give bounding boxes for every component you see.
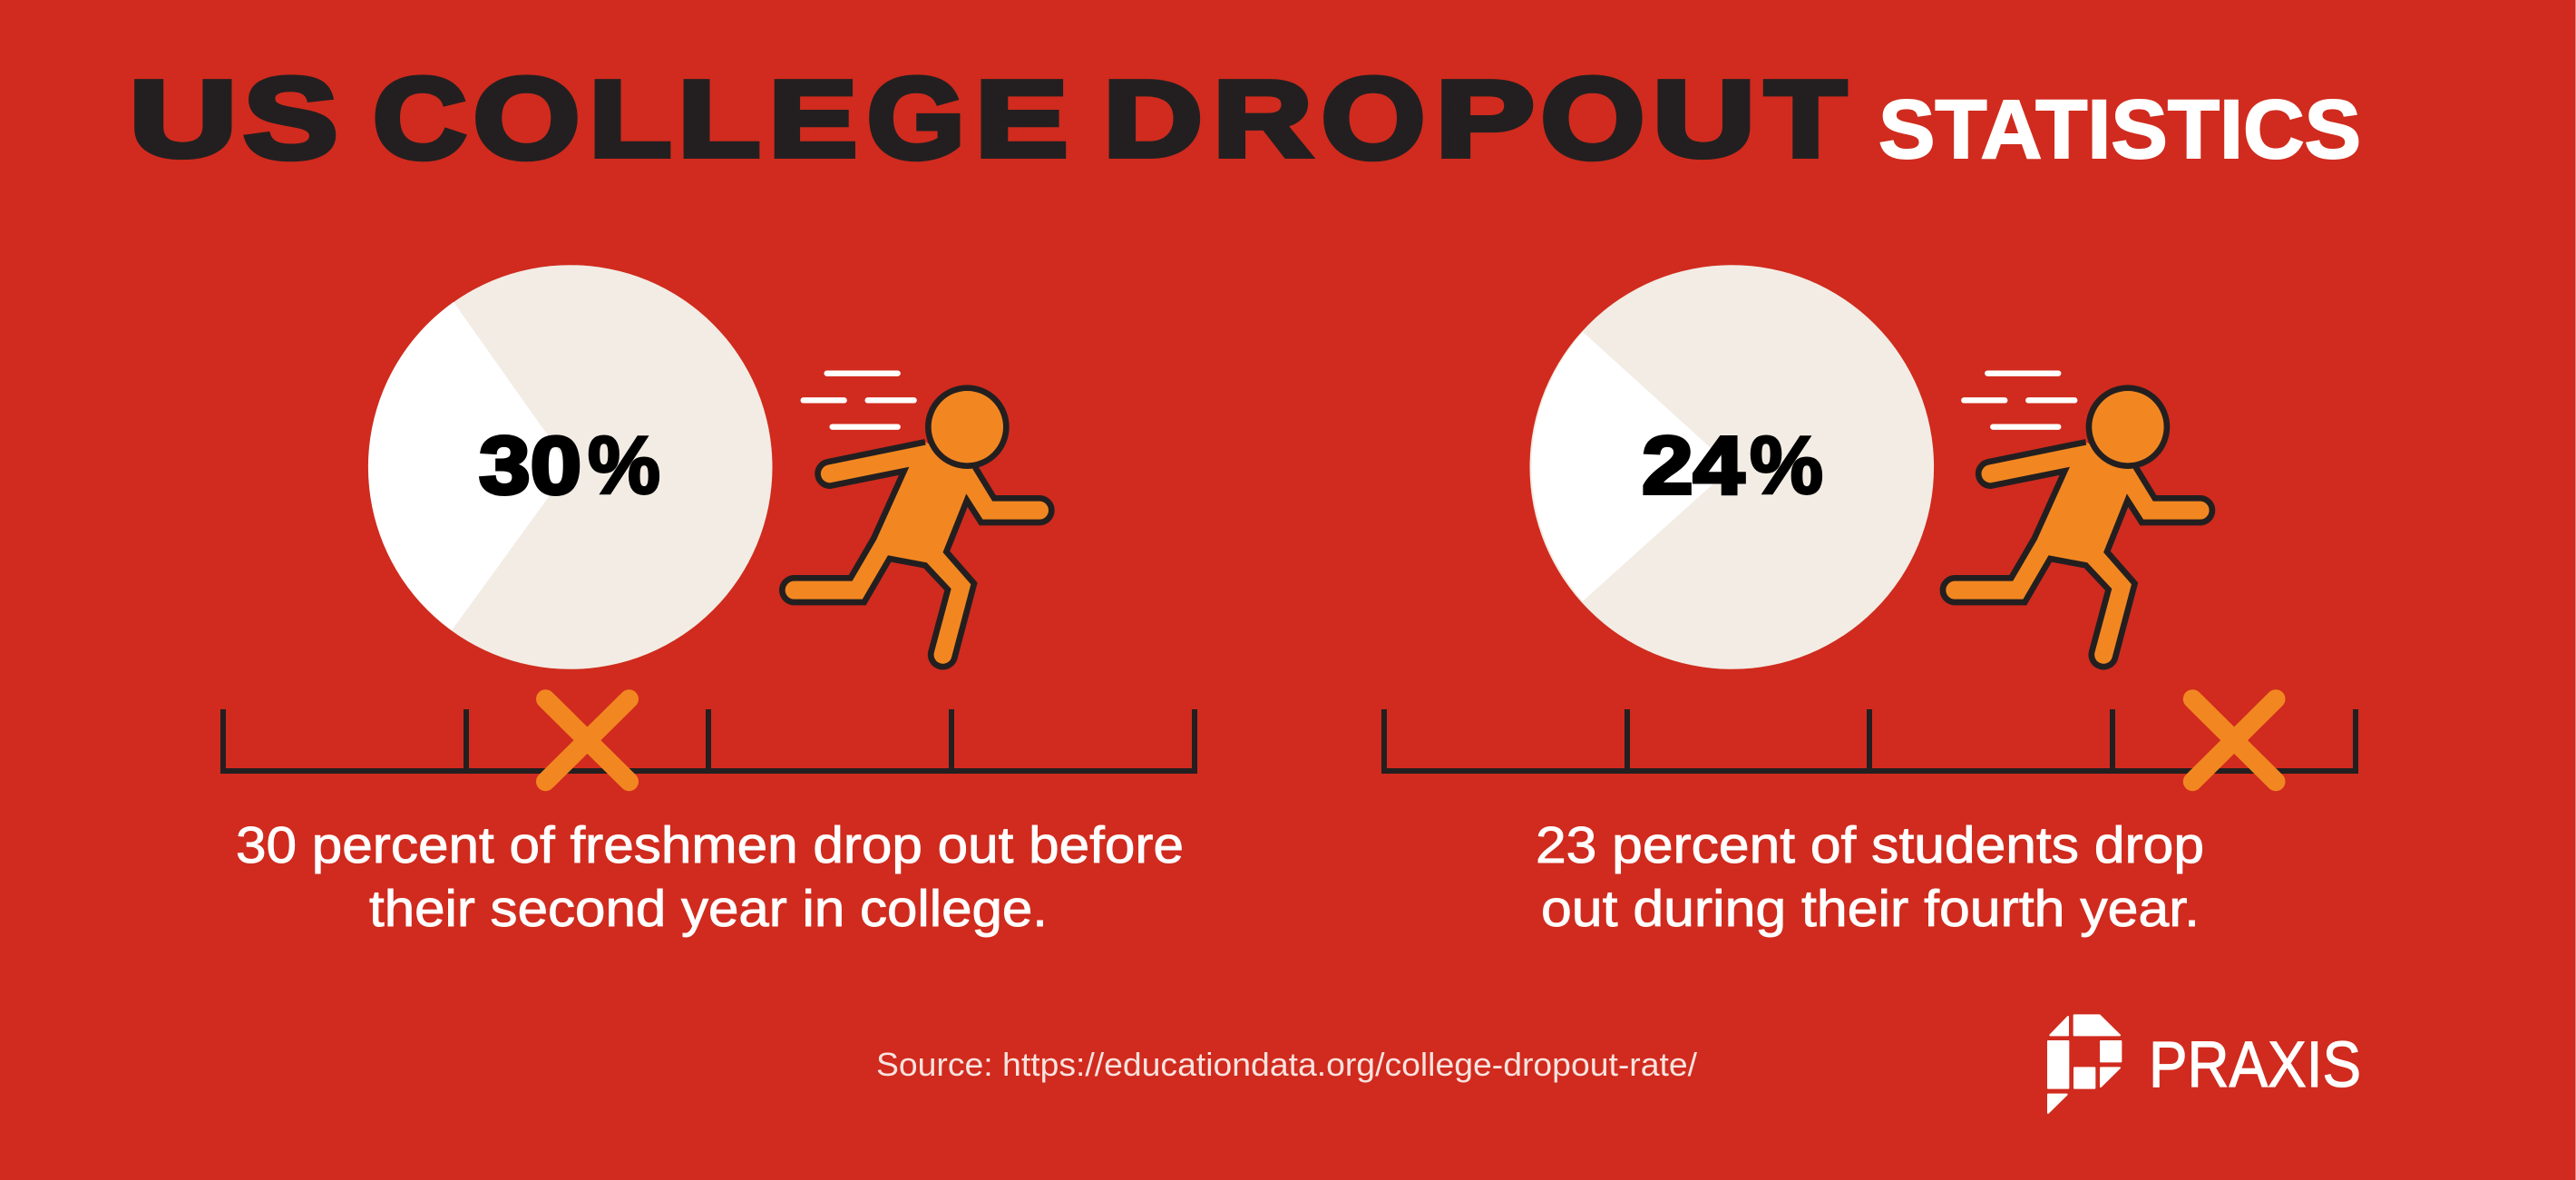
pie chart: 24%: [1529, 265, 1934, 669]
pie chart: 30%: %: [588, 421, 660, 512]
title: P: [1435, 59, 1535, 180]
title: O: [473, 54, 581, 182]
title: T: [1765, 59, 1846, 180]
caption: freshmen: their second year in college.: [369, 880, 1048, 938]
title: G: [867, 54, 965, 182]
logo: Praxis: PRAXIS: [2149, 1029, 2361, 1101]
pie chart: 24%: 24: [1642, 421, 1744, 512]
source note: Source: https://educationdata.org/college-dropout-rate/: [876, 1046, 1697, 1083]
caption: fourth year: 23 percent of students drop: [1536, 816, 2204, 874]
title: L: [678, 59, 760, 180]
title: U: [129, 59, 237, 180]
title: O: [1322, 54, 1425, 182]
title: U: [1653, 59, 1755, 180]
icon: running student: [1943, 374, 2212, 667]
caption: freshmen: 30 percent of freshmen drop out before: [236, 816, 1184, 874]
title: D: [1103, 59, 1203, 180]
pie chart: 24%: %: [1750, 421, 1823, 512]
timeline: year four marker: [1384, 699, 2356, 782]
title: C: [373, 54, 466, 182]
pie chart: 30%: 30: [479, 421, 581, 512]
panel: fourth-year dropout: [1384, 265, 2356, 938]
title: E: [769, 59, 857, 180]
logo: Praxis: [2048, 1015, 2361, 1113]
panel: freshmen dropout: [223, 265, 1195, 938]
title: [129, 54, 2361, 182]
caption: freshmen: [236, 816, 1184, 938]
title: R: [1213, 59, 1312, 180]
title: S: [243, 54, 338, 182]
title: L: [589, 59, 671, 180]
timeline: year one marker: [223, 699, 1195, 782]
caption: fourth year: out during their fourth year.: [1541, 880, 2200, 938]
title: STATISTICS: [1878, 83, 2361, 176]
icon: running student: [782, 374, 1051, 667]
caption: fourth year: [1536, 816, 2204, 938]
pie chart: 30%: [368, 265, 773, 669]
title: O: [1541, 54, 1644, 182]
title: E: [975, 59, 1068, 180]
